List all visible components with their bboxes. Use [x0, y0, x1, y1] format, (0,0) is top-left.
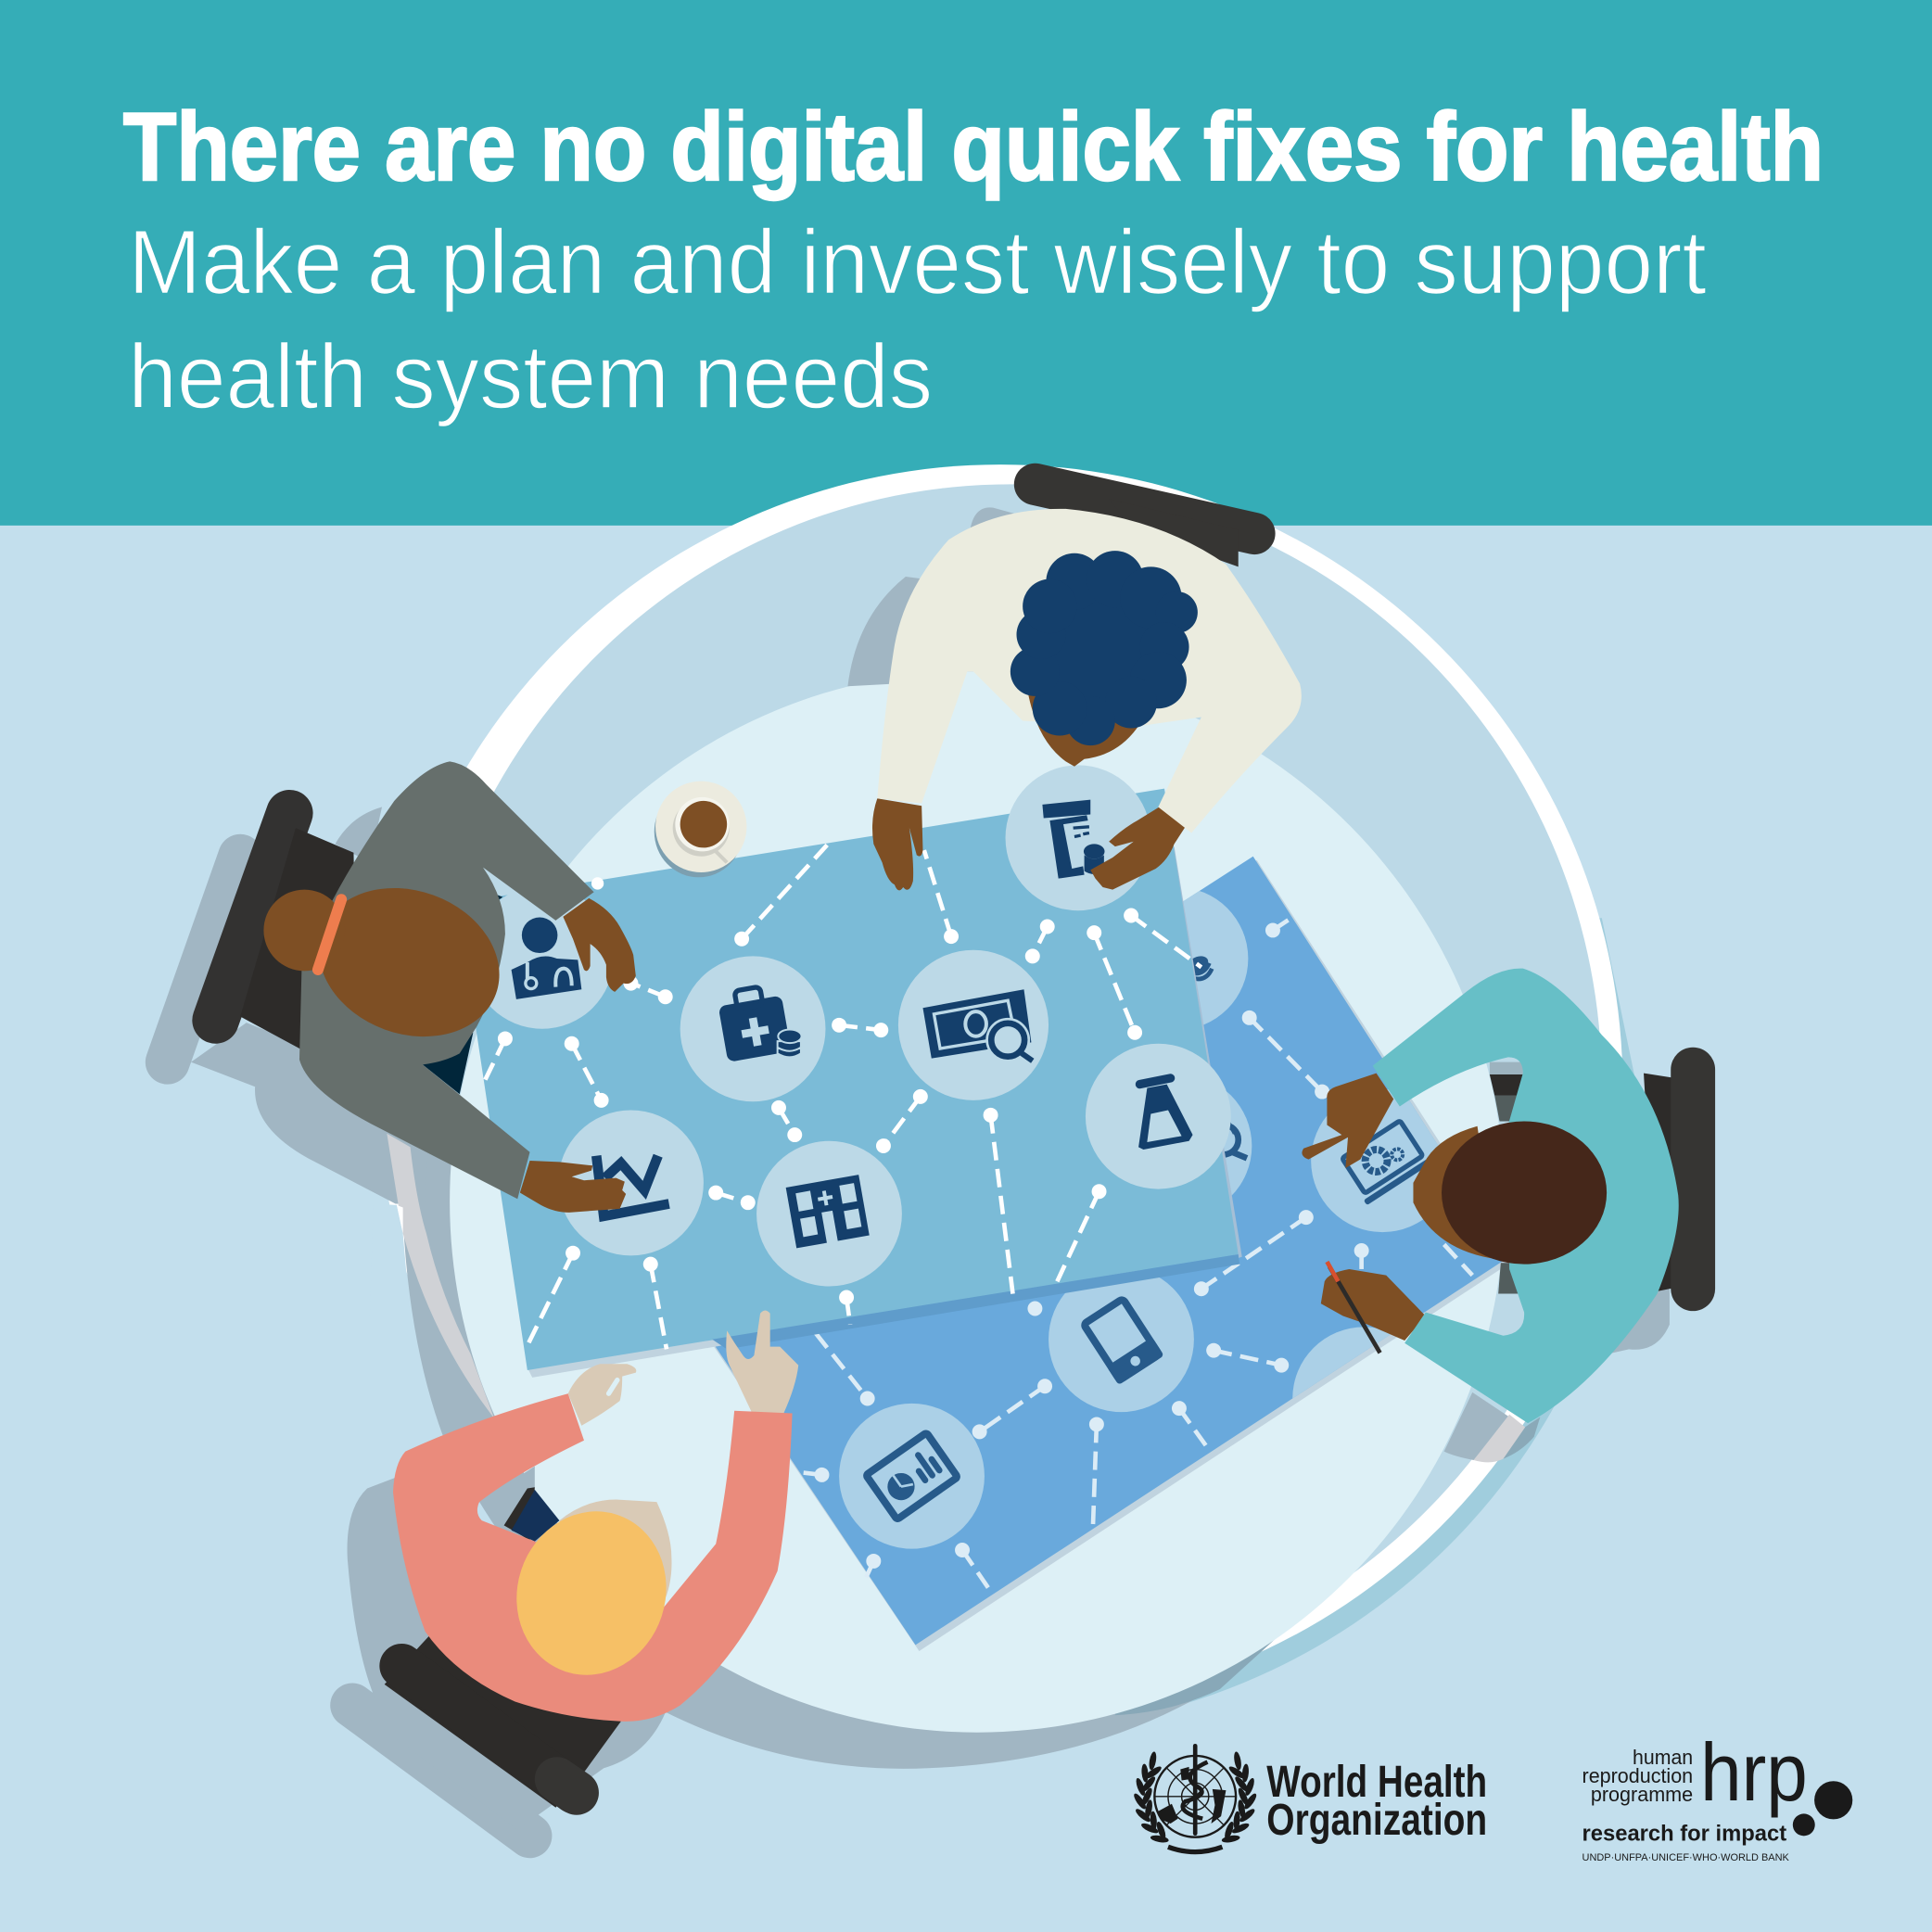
- icon: money with magnifier: [922, 989, 1033, 1062]
- connector dots: light sheet: [498, 877, 1142, 1304]
- icon: magnifier partly hidden: [1209, 1094, 1247, 1158]
- icon: hospital: [786, 1175, 870, 1250]
- connector dots: blue sheet: [815, 922, 1369, 1569]
- subtitle: health system needs: [128, 325, 933, 427]
- chair: right: [1490, 1062, 1693, 1294]
- icon: flask: [1138, 1078, 1193, 1150]
- pointing hand: bottom person: [726, 1310, 798, 1413]
- connectors: light sheet: [483, 844, 1201, 1349]
- WHO emblem: [1132, 1746, 1258, 1852]
- HRP logo: human: [1633, 1746, 1693, 1769]
- right hand: top person: [1090, 805, 1186, 890]
- left hand: top person: [872, 798, 922, 890]
- writing hand: right person: [1321, 1269, 1426, 1341]
- person: right, teal top: [1302, 969, 1693, 1423]
- header band: [0, 0, 1932, 526]
- HRP logo: programme: [1591, 1783, 1693, 1806]
- upper hand: bottom person: [568, 1364, 636, 1426]
- WHO logo: World Health: [1266, 1758, 1487, 1807]
- HRP logo: UNDP·UNFPA·UNICEF·WHO·WORLD BANK: [1582, 1852, 1789, 1863]
- icon: coins partly hidden: [1185, 953, 1214, 983]
- jumper: [877, 509, 1302, 833]
- map nodes: light sheet: [471, 765, 1231, 1287]
- icon: dashboard: [866, 1432, 958, 1519]
- subtitle: Make a plan and invest wisely to support: [128, 210, 1707, 312]
- head: left person: [263, 863, 520, 1061]
- subtitle: [128, 210, 1707, 427]
- person: left, grey jacket: [216, 761, 636, 1213]
- lower hand: left person: [520, 1161, 626, 1213]
- icon: pill bottle: [1042, 800, 1105, 879]
- shadow: left person: [168, 807, 431, 1204]
- icon: doctor: [512, 918, 581, 999]
- face: top person: [1026, 684, 1149, 767]
- chair: bottom: [385, 1636, 621, 1808]
- map sheet: blue back: [705, 857, 1516, 1651]
- hair: right person: [1442, 1121, 1607, 1265]
- jacket: [299, 761, 594, 1199]
- hair: bottom person: [496, 1492, 687, 1695]
- icon: line chart: [596, 1156, 669, 1216]
- coffee cup: [655, 782, 746, 877]
- shirt: left person: [423, 890, 502, 1094]
- upper hand: left person: [563, 898, 636, 992]
- pointing hand: right person: [1302, 1074, 1393, 1168]
- map nodes: blue sheet: [839, 887, 1454, 1549]
- HRP logo: research for impact: [1582, 1822, 1786, 1847]
- gap between arm and body: [479, 1467, 535, 1542]
- hair: top person: [1010, 551, 1198, 745]
- person: top, cream jumper: [872, 484, 1302, 890]
- person: bottom, pink jumper: [385, 1310, 798, 1808]
- HRP logo: hrp: [1700, 1727, 1808, 1818]
- WHO logo: Organization: [1266, 1796, 1487, 1845]
- jumper: [393, 1393, 793, 1722]
- chair: left: [216, 813, 357, 1049]
- icon: medical bag: [716, 984, 802, 1062]
- hair band: [318, 899, 341, 970]
- shadow: right person: [1444, 1281, 1670, 1462]
- icon: tablet: [1084, 1299, 1159, 1380]
- HRP logo: [1582, 1727, 1852, 1863]
- chair: top: [1035, 484, 1254, 718]
- map sheet: light front: [457, 765, 1242, 1378]
- HRP logo: reproduction: [1582, 1764, 1693, 1787]
- shadow: bottom person: [348, 1467, 666, 1836]
- connectors: blue sheet: [801, 918, 1472, 1590]
- teal top: [1373, 969, 1679, 1423]
- icon: laptop with gears: [1338, 1118, 1433, 1205]
- shirt: bottom person: [504, 1487, 559, 1542]
- WHO logo: [1132, 1746, 1487, 1852]
- pencil: [1327, 1262, 1380, 1353]
- round table: [168, 462, 1635, 1769]
- shadow: top person: [847, 507, 1029, 686]
- scalp: bottom person: [559, 1499, 671, 1604]
- face: right person: [1413, 1126, 1497, 1259]
